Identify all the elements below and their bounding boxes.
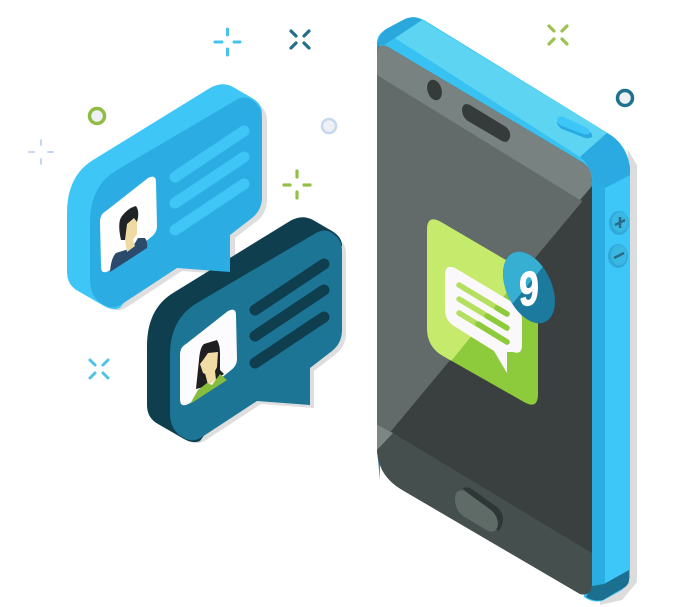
shoulders	[110, 238, 147, 272]
chat bubble: dark	[147, 217, 346, 443]
top bezel light	[377, 40, 600, 200]
sparkle: light blue cross	[90, 360, 108, 378]
side strip dark	[592, 178, 605, 586]
top-right corner	[580, 133, 630, 188]
top-left corner	[377, 17, 422, 48]
text lines	[175, 131, 244, 230]
volume up button	[609, 211, 629, 235]
ring: pale blue	[322, 119, 336, 133]
photo: woman	[180, 310, 237, 405]
neck	[205, 371, 216, 385]
shirt	[190, 374, 227, 404]
ring: green	[90, 108, 104, 124]
hair	[196, 340, 224, 389]
bubble face	[90, 98, 262, 307]
bottom bezel	[377, 433, 592, 594]
notification tile	[427, 219, 555, 405]
bubble side	[67, 84, 262, 309]
sparkle: pale plus	[29, 140, 53, 164]
tile highlight	[427, 219, 507, 361]
power button	[557, 116, 592, 138]
face and neck	[122, 216, 137, 252]
text lines	[255, 264, 324, 363]
sparkle: blue plus	[215, 29, 240, 55]
screen light area	[377, 40, 600, 448]
body left edge	[377, 42, 380, 480]
phone shadow	[600, 150, 637, 605]
bubble face	[170, 230, 342, 440]
sparkle: green cross	[549, 26, 567, 44]
top face highlight	[395, 20, 607, 157]
face	[200, 352, 218, 377]
speaker	[462, 104, 510, 142]
bottom bezel highlight	[377, 424, 393, 450]
volume down button	[608, 244, 628, 268]
photo: man	[100, 177, 157, 272]
message lines	[459, 285, 507, 342]
hair	[119, 206, 138, 240]
top face band	[377, 38, 592, 180]
badge	[503, 252, 555, 324]
camera	[425, 78, 444, 102]
side strip bottom end	[586, 570, 629, 601]
chat bubble: blue	[67, 84, 262, 309]
phone body	[377, 17, 630, 601]
bubble side	[147, 217, 342, 442]
sparkle: green plus	[284, 171, 310, 198]
phone screen	[370, 40, 600, 600]
top bezel right shade	[580, 186, 592, 201]
ring: dark teal	[618, 90, 632, 106]
phone	[370, 17, 637, 605]
bubble shadow	[174, 234, 346, 443]
blue bubble shadow	[95, 100, 267, 310]
badge number: 9	[519, 261, 539, 317]
sparkle: dark teal cross	[291, 31, 309, 48]
message icon	[445, 267, 522, 373]
home button	[455, 487, 503, 532]
